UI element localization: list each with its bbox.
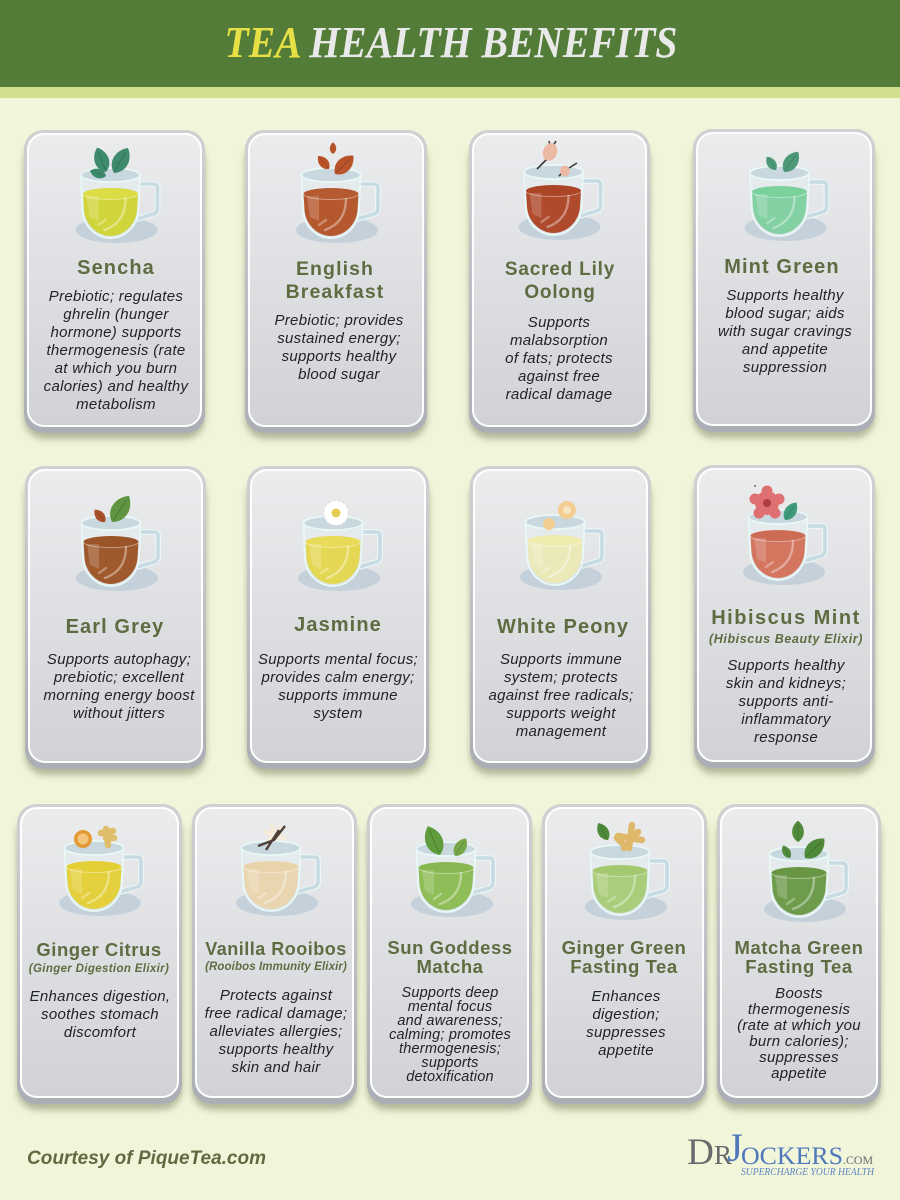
text: Sun Goddess Matcha benefits: Supports deep [402,985,498,1001]
logo: DrJockers.com: OCKERS [741,1143,843,1170]
panel: Matcha Green Fasting Tea [717,804,881,1110]
text: White Peony benefits: against free radicals; [488,687,634,704]
text: Sun Goddess Matcha benefits: mental focus [408,999,492,1015]
text: Jasmine benefits: supports immune [278,687,398,704]
icon: Hibiscus Mint mug [743,485,825,585]
heading: Sacred Lily Oolong: Oolong [524,282,596,303]
text: Hibiscus Mint benefits: supports anti- [738,693,834,710]
heading: Mint Green: Mint Green [724,256,840,278]
text: English Breakfast benefits: Prebiotic; provides [274,312,404,329]
text: Ginger Green Fasting Tea benefits: appetite [598,1042,654,1059]
logo: DrJockers.com: R [714,1140,732,1170]
text: Hibiscus Mint benefits: skin and kidneys; [726,675,846,692]
icon: Vanilla Rooibos mug [236,826,318,916]
logo: DrJockers.com: J [727,1125,743,1170]
text: Sencha benefits: metabolism [76,396,156,413]
icon: Ginger Green Fasting Tea mug [585,820,667,920]
heading: Ginger Green Fasting Tea: Ginger Green [562,937,686,958]
panel: Mint Green [693,129,875,438]
text: Ginger Green Fasting Tea benefits: Enhances [591,988,661,1005]
heading: Sun Goddess Matcha: Matcha [416,956,484,977]
panel: Ginger Citrus [17,804,182,1110]
heading: Matcha Green Fasting Tea: Matcha Green [735,937,863,958]
text: Matcha Green Fasting Tea benefits: burn calories); [749,1033,849,1050]
text: English Breakfast benefits: sustained energy; [277,330,401,347]
icon: Sencha mug [76,144,158,243]
heading: Ginger Citrus: Ginger Citrus [36,939,162,960]
text: Vanilla Rooibos benefits: alleviates allergies; [209,1023,343,1040]
text: Jasmine benefits: provides calm energy; [260,669,415,686]
text: Matcha Green Fasting Tea benefits: thermogenesis [748,1001,850,1018]
panel: Vanilla Rooibos [192,804,357,1110]
heading: Sun Goddess Matcha: Sun Goddess [387,937,513,958]
text: Mint Green benefits: with sugar cravings [718,323,852,340]
text: Sacred Lily Oolong benefits: Supports [528,314,590,331]
text: Mint Green benefits: suppression [743,359,827,376]
panel: Hibiscus Mint [694,465,875,774]
text: Ginger Green Fasting Tea benefits: digestion; [592,1006,660,1023]
heading: Sacred Lily Oolong: Sacred Lily [505,259,615,280]
text: White Peony benefits: management [516,723,607,740]
title: TEA HEALTH BENEFITS [224,18,678,67]
text: Hibiscus Mint benefits: response [754,729,818,746]
text: Sencha benefits: calories) and healthy [44,378,190,395]
text: Ginger Green Fasting Tea benefits: suppresses [586,1024,666,1041]
text: Vanilla Rooibos benefits: supports healthy [219,1041,335,1058]
credit: Courtesy of PiqueTea.com: Courtesy of PiqueTea.com [27,1148,266,1169]
text: English Breakfast benefits: supports healthy [282,348,398,365]
icon: Ginger Citrus mug [59,829,141,916]
panel: Sacred Lily Oolong [469,130,650,439]
text: Sencha benefits: hormone) supports [50,324,182,341]
text: Sencha benefits: at which you burn [55,360,177,377]
text: Matcha Green Fasting Tea benefits: Boosts [775,985,823,1002]
text: Ginger Citrus benefits: discomfort [64,1024,137,1041]
text: Matcha Green Fasting Tea benefits: appetite [771,1065,827,1082]
text: Sun Goddess Matcha benefits: thermogenesis; [399,1041,501,1057]
text: Earl Grey benefits: morning energy boost [43,687,195,704]
heading: English Breakfast: English [296,258,374,280]
text: Vanilla Rooibos benefits: skin and hair [232,1059,321,1076]
heading: Jasmine: Jasmine [294,614,382,636]
text: Sacred Lily Oolong benefits: malabsorption [510,332,608,349]
panel: English Breakfast [245,130,427,439]
logo: DrJockers.com: D [687,1132,714,1173]
text: Sencha benefits: ghrelin (hunger [63,306,169,323]
text: Mint Green benefits: blood sugar; aids [725,305,845,322]
panel: Jasmine [247,466,429,775]
subheading: Rooibos Immunity Elixir: (Rooibos Immunity Elixir) [205,961,347,973]
subheading: Hibiscus Beauty Elixir: (Hibiscus Beauty Elixir) [709,632,863,646]
logo: DrJockers.com: .COM [843,1153,873,1167]
icon: Sacred Lily Oolong mug [518,141,600,240]
panel: Ginger Green Fasting Tea [542,804,707,1110]
icon: Jasmine mug [298,500,380,591]
heading: Earl Grey: Earl Grey [66,616,164,638]
text: Sencha benefits: thermogenesis (rate [46,342,186,359]
panel: Sencha [24,130,205,439]
text: White Peony benefits: supports weight [506,705,616,722]
text: Hibiscus Mint benefits: inflammatory [741,711,832,728]
text: Vanilla Rooibos benefits: free radical damage; [205,1005,347,1022]
text: Sun Goddess Matcha benefits: supports [421,1055,479,1071]
text: White Peony benefits: system; protects [504,669,618,686]
icon: Earl Grey mug [76,491,158,591]
panel: Sun Goddess Matcha [367,804,532,1110]
text: Ginger Citrus benefits: Enhances digestion, [30,988,170,1005]
heading: Hibiscus Mint: Hibiscus Mint [711,607,861,629]
icon: Sun Goddess Matcha mug [411,823,493,917]
text: Sacred Lily Oolong benefits: against free [518,368,600,385]
text: Matcha Green Fasting Tea benefits: (rate at which you [737,1017,861,1034]
icon: Mint Green mug [744,148,826,241]
text: Mint Green benefits: and appetite [742,341,828,358]
panel: White Peony [470,466,651,775]
text: Jasmine benefits: system [313,705,363,722]
text: Mint Green benefits: Supports healthy [726,287,845,304]
heading: Vanilla Rooibos: Vanilla Rooibos [205,939,347,959]
subheading: Ginger Digestion Elixir: (Ginger Digestion Elixir) [29,963,169,975]
text: Sun Goddess Matcha benefits: and awareness; [397,1013,503,1029]
text: Jasmine benefits: Supports mental focus; [258,651,418,668]
text: Earl Grey benefits: Supports autophagy; [47,651,191,668]
text: Hibiscus Mint benefits: Supports healthy [727,657,846,674]
logo: DrJockers.com [687,1125,875,1178]
icon: English Breakfast mug [296,142,378,243]
heading: Ginger Green Fasting Tea: Fasting Tea [570,956,678,977]
text: English Breakfast benefits: blood sugar [298,366,381,383]
heading: English Breakfast: Breakfast [286,281,384,303]
heading: Matcha Green Fasting Tea: Fasting Tea [745,956,853,977]
text: Ginger Citrus benefits: soothes stomach [41,1006,159,1023]
header banner [0,0,900,98]
text: Sacred Lily Oolong benefits: of fats; protects [505,350,613,367]
logo: DrJockers.com: SUPERCHARGE YOUR HEALTH [741,1167,875,1178]
heading: Sencha: Sencha [77,257,155,279]
text: Matcha Green Fasting Tea benefits: suppresses [759,1049,839,1066]
text: Earl Grey benefits: without jitters [73,705,165,722]
text: Sun Goddess Matcha benefits: detoxification [406,1069,494,1085]
icon: Matcha Green Fasting Tea mug [764,821,846,922]
icon: White Peony mug [520,501,602,590]
text: White Peony benefits: Supports immune [500,651,622,668]
panel: Earl Grey [25,466,206,775]
text: Sacred Lily Oolong benefits: radical damage [506,386,612,403]
text: Earl Grey benefits: prebiotic; excellent [53,669,185,686]
text: Vanilla Rooibos benefits: Protects against [220,987,333,1004]
text: Sencha benefits: Prebiotic; regulates [49,288,183,305]
text: Sun Goddess Matcha benefits: calming; promotes [389,1027,511,1043]
heading: White Peony: White Peony [497,616,629,638]
